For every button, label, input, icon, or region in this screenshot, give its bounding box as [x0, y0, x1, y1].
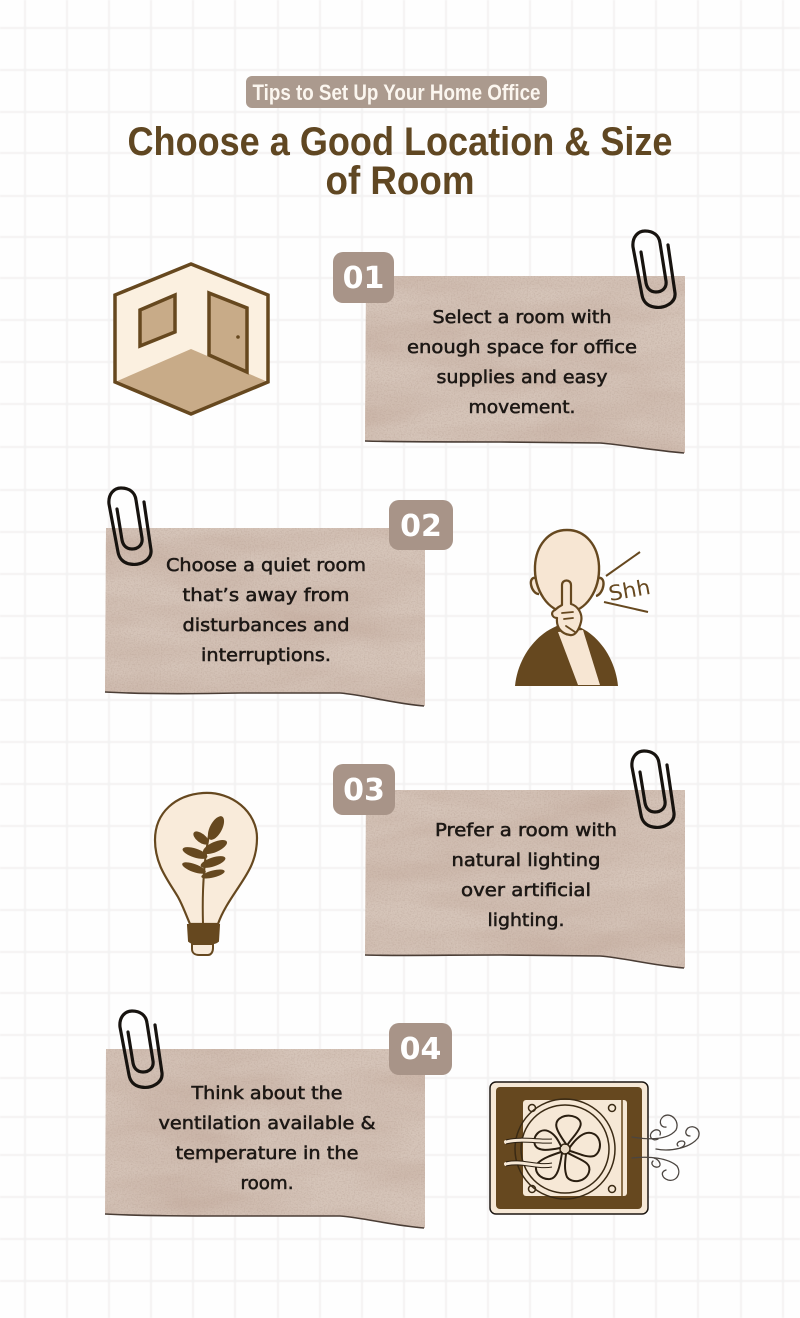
text 1: [407, 307, 637, 418]
fan blades: [534, 1116, 600, 1181]
title: of Room: [326, 159, 474, 203]
text 1: movement.: [468, 397, 576, 418]
number badge 01: [333, 252, 394, 303]
text 4: ventilation available &: [158, 1113, 376, 1134]
arm: [558, 630, 600, 685]
header tag: [246, 76, 547, 108]
text 2: that’s away from: [182, 585, 350, 606]
text 4: room.: [240, 1173, 294, 1194]
number badge 03: 03: [343, 773, 385, 808]
text 2: Choose a quiet room: [166, 555, 366, 576]
number badge 02: 02: [400, 509, 442, 544]
icon: person saying shh: [515, 530, 652, 686]
number badge 01: 01: [343, 261, 384, 296]
title: Choose a Good Location & Size: [128, 120, 672, 164]
text 4: [158, 1083, 376, 1194]
paper card 2: [105, 528, 425, 706]
number badge 04: 04: [400, 1032, 441, 1067]
text 2: interruptions.: [201, 645, 331, 666]
text 1: enough space for office: [407, 337, 637, 358]
text 1: supplies and easy: [436, 367, 608, 388]
air swirls: [632, 1115, 699, 1180]
shoulders: [515, 623, 618, 686]
head: [535, 530, 599, 612]
text 4: Think about the: [190, 1083, 342, 1104]
text 2: [166, 555, 366, 666]
icon: ventilation fan: [490, 1082, 699, 1214]
text 3: natural lighting: [452, 850, 600, 871]
number badge 03: [333, 764, 395, 815]
paperclip 2: [109, 488, 151, 564]
ears: [531, 578, 604, 596]
panel: step 1: [333, 231, 685, 453]
panel: step 4: [105, 1011, 452, 1228]
wires: [506, 1140, 552, 1166]
text 2: disturbances and: [182, 615, 350, 636]
text 3: lighting.: [488, 910, 564, 931]
panel: step 3: [333, 751, 685, 968]
paperclip 4: [120, 1011, 162, 1087]
paperclip 3: [632, 751, 674, 827]
sound lines: [604, 552, 648, 612]
paper card 3: [365, 790, 685, 968]
title: [128, 120, 672, 203]
text 3: over artificial: [461, 880, 591, 901]
icon: plant light bulb: [155, 793, 257, 955]
number badge 02: [389, 500, 453, 550]
number badge 04: [389, 1023, 452, 1075]
text 3: Prefer a room with: [435, 820, 617, 841]
header tag: Tips to Set Up Your Home Office: [252, 80, 540, 105]
text 1: Select a room with: [432, 307, 612, 328]
hand and finger: [552, 580, 581, 635]
panel: step 2: [105, 488, 453, 706]
paperclip 1: [633, 231, 675, 307]
Shh label: Shh: [607, 575, 652, 606]
paper card 1: [365, 276, 685, 453]
text 4: temperature in the: [176, 1143, 358, 1164]
icon: room: [115, 264, 268, 414]
paper card 4: [105, 1049, 425, 1228]
text 3: [435, 820, 617, 931]
